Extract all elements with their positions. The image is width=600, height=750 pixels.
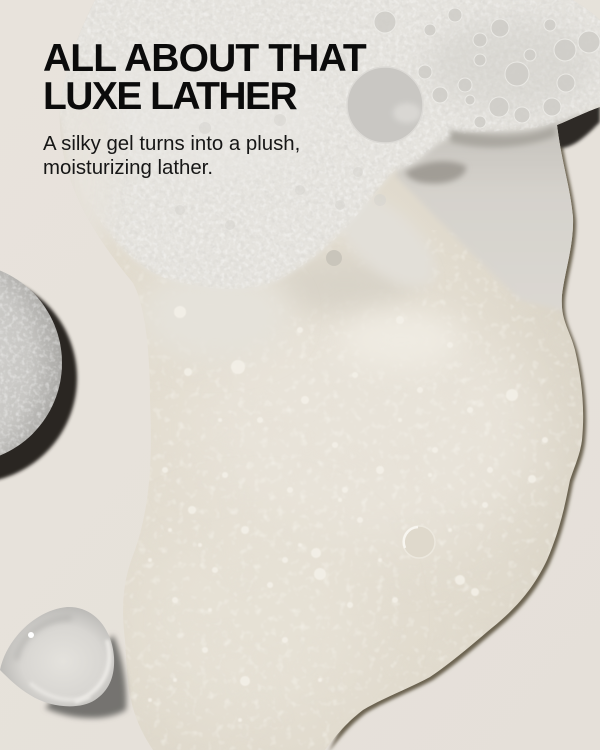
foam cast shadow, top right [553,92,600,148]
foam ball at left edge [0,260,77,483]
foam tongue shadow [405,161,466,184]
foam bubbles, faint [175,53,386,230]
gel dimple [326,250,342,266]
translucent clear gel pocket [395,110,600,320]
droplet shadow [45,635,126,718]
bubbly transition below foam [350,204,430,283]
foam ball shadow [0,273,77,483]
subtitle text: A silky gel turns into a plush, [43,133,300,155]
title: ALL ABOUT THAT [43,37,366,80]
large clear bubble [347,67,423,143]
gel bubbles [148,306,548,722]
foam cap [40,0,600,289]
title: LUXE LATHER [43,75,296,118]
large gel bubble [403,526,435,558]
clear gel droplet [0,607,126,718]
subtitle text: moisturizing lather. [43,157,213,179]
gel edge shadow [328,128,586,750]
foam bubbles, right [374,8,600,128]
subtitle text [43,133,300,179]
title [43,37,366,118]
